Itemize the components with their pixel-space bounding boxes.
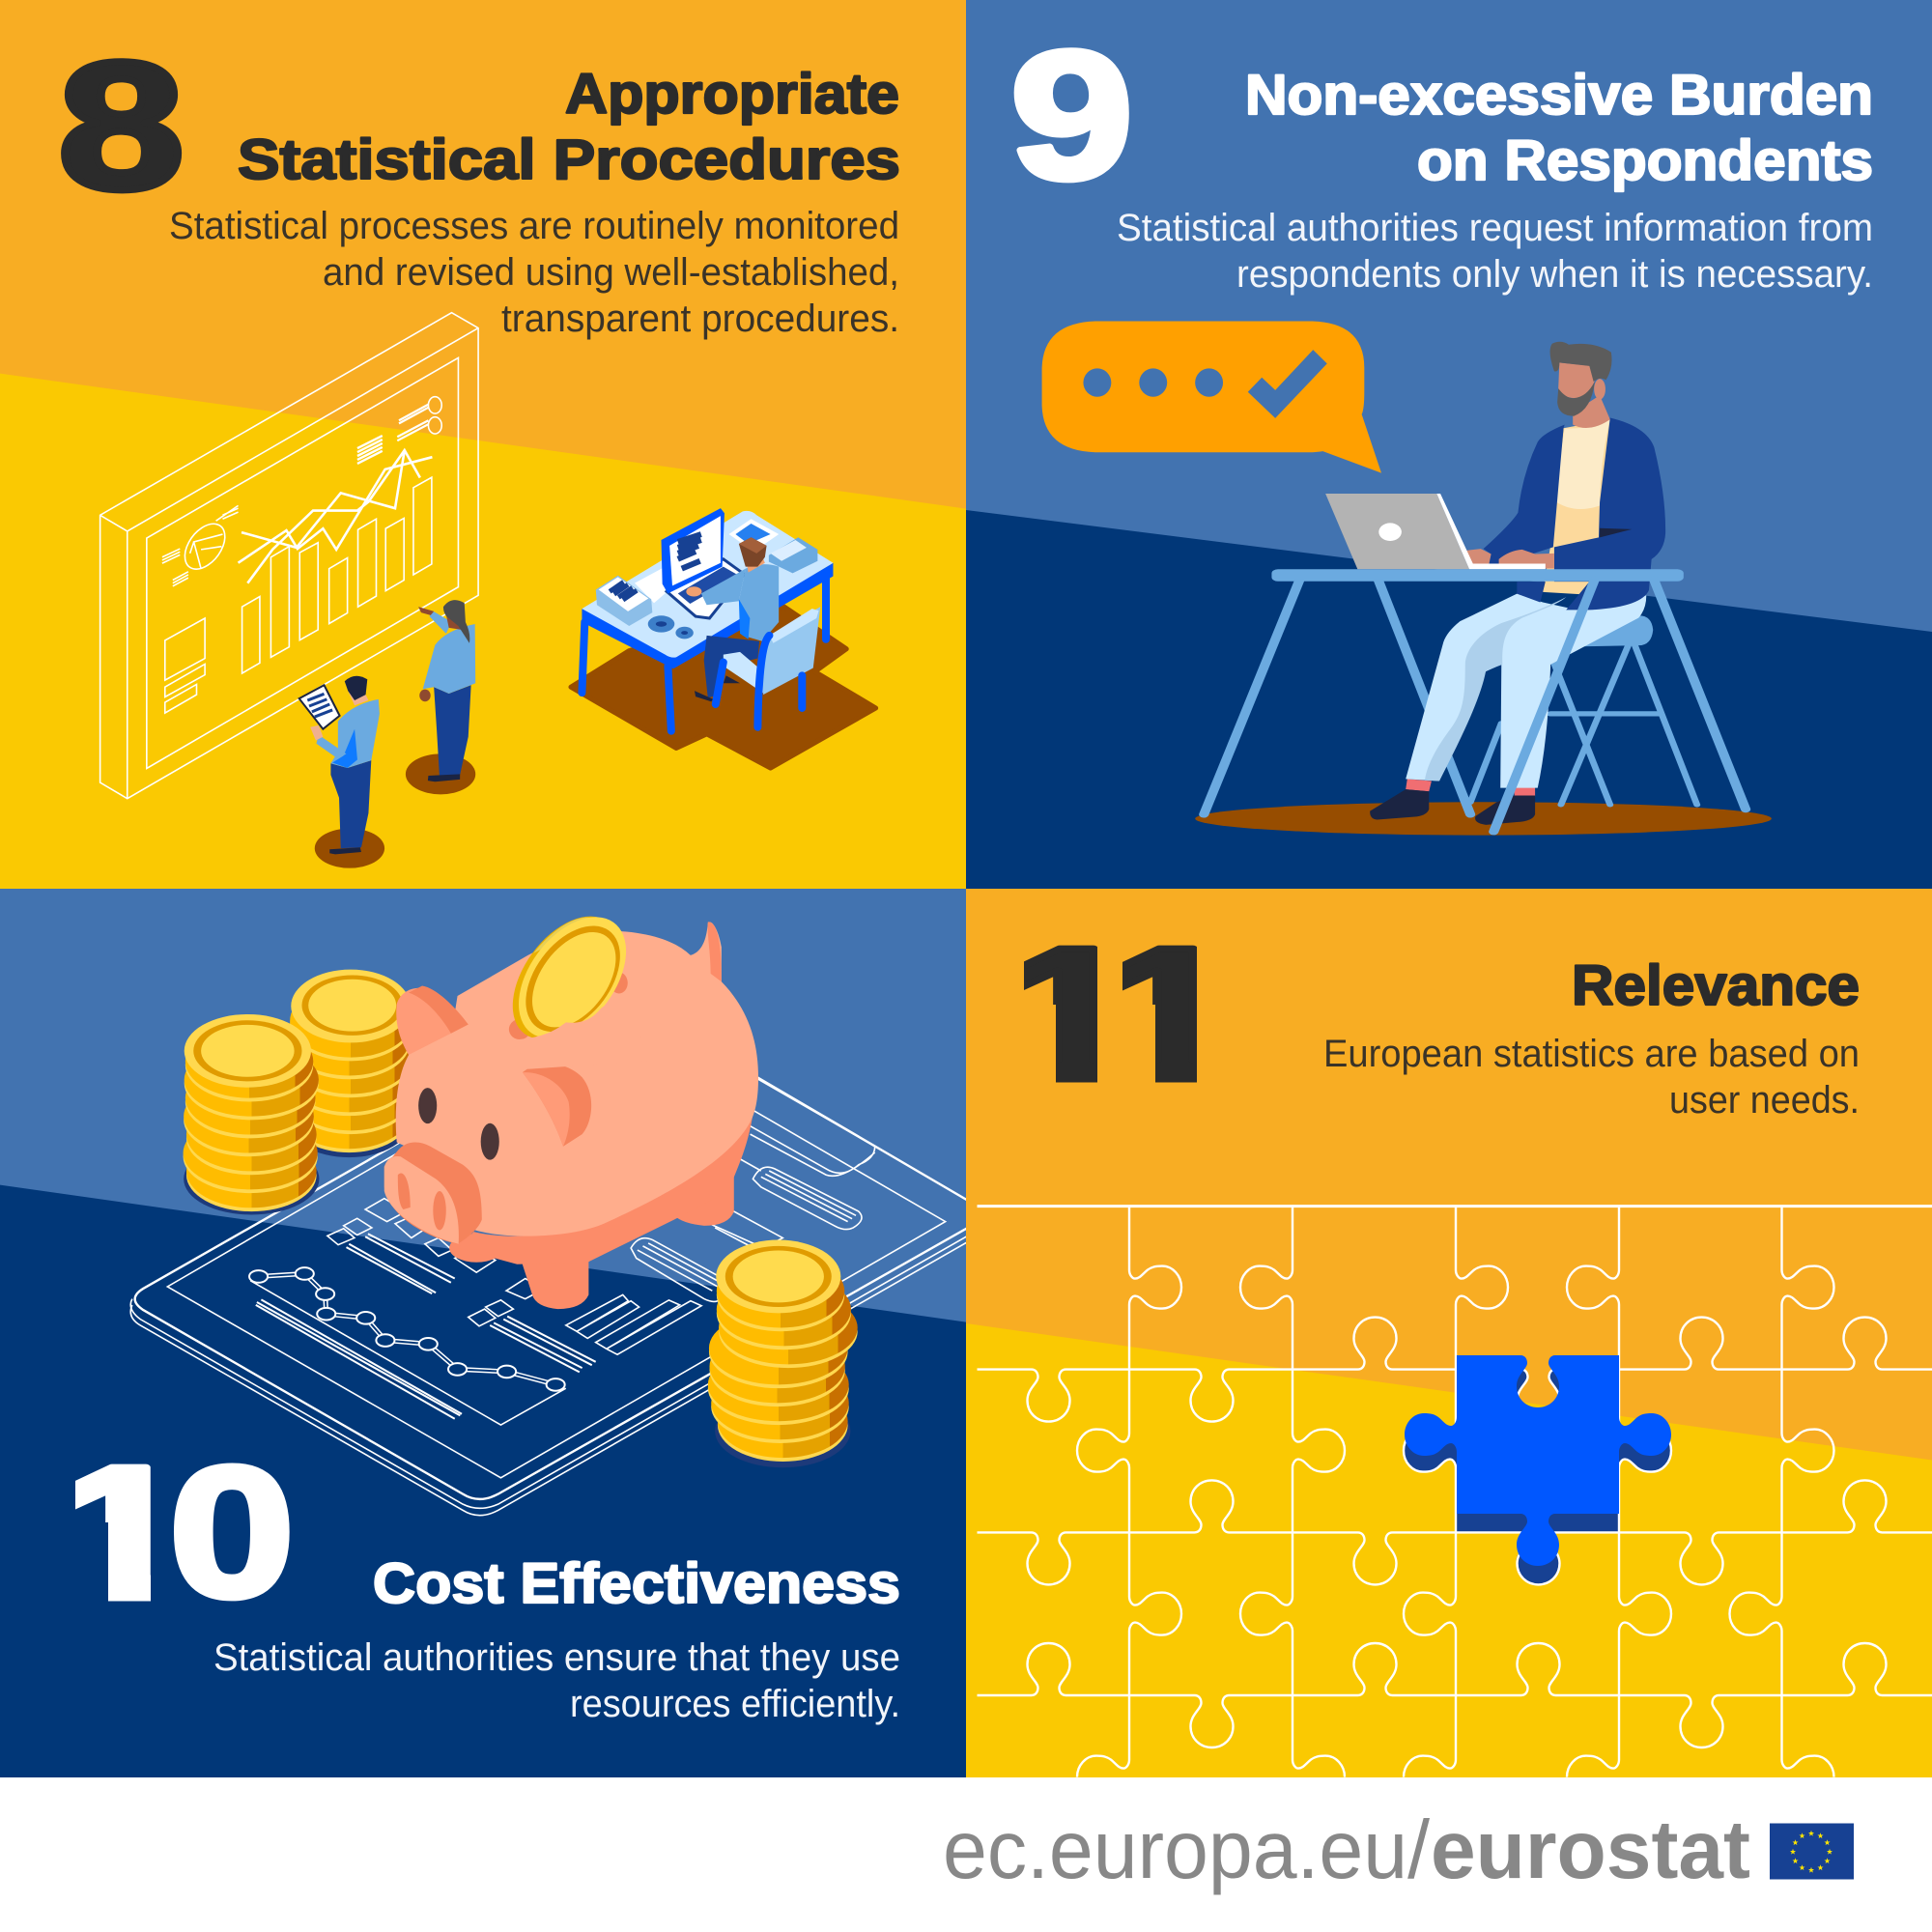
heading 8: Appropriate [565,63,899,126]
empty slot shadow [1404,1370,1671,1584]
illustration: piggy bank, coins and tablet [130,905,1000,1516]
heading 9: Non-excessive Burden [1245,64,1873,127]
heading 8: Statistical Procedures [238,128,900,191]
panel: principle 8 [0,0,966,889]
heading 11: Relevance [1572,954,1860,1017]
speech bubble with dots and check mark [1042,321,1381,473]
body text 9: respondents only when it is necessary. [1236,253,1873,296]
website address [943,1804,1750,1896]
panel 8 background [0,0,966,889]
body text 8: Statistical processes are routinely monitored [169,205,899,247]
number 11 [1024,945,1197,1082]
blue puzzle piece [1405,1355,1671,1566]
puzzle outline grid [978,1207,1932,1777]
body text 10 [213,1636,900,1725]
panel 10 background [0,889,966,1777]
body text 8: transparent procedures. [501,298,899,340]
body text 8 [169,205,899,340]
number 10 [75,1463,290,1602]
panel: principle 11 [966,889,1932,1777]
coin stack front left [184,1014,319,1214]
wireframe data board [100,313,478,799]
body text 9: Statistical authorities request information from [1117,207,1873,249]
number 8: 8 [58,24,185,227]
laptop [1325,494,1546,569]
heading 10: Cost Effectiveness [373,1552,900,1615]
floor shadow [1195,802,1772,836]
panel 8 yellow floor [0,374,966,889]
table top and front legs [1271,569,1746,832]
number 10: 1 [49,1427,194,1638]
coin entering the slot [512,916,626,1069]
number 9: 9 [1010,14,1133,216]
panel 10 navy floor [0,1185,966,1777]
panel: principle 10 [0,889,1000,1777]
woman pointing at the board [406,600,475,794]
jigsaw puzzle [978,1207,1932,1777]
seated man [1370,342,1665,825]
EU flag [1770,1824,1854,1880]
body text 11 [1323,1033,1860,1122]
desk with worker [571,508,876,768]
body text 9 [1117,207,1873,296]
footer [0,1777,1932,1932]
website address: eurostat [1431,1804,1750,1896]
chart line with nodes [249,1267,565,1391]
heading 8 [238,63,900,191]
coin stack back left [287,970,412,1157]
piggy bank [384,905,758,1309]
panel 9 background [966,0,1932,889]
footer background [0,1777,1932,1932]
number 10: 0 [169,1428,295,1635]
body text 11: European statistics are based on [1323,1033,1860,1075]
body text 10: resources efficiently. [570,1683,900,1725]
panel 11 background [966,889,1932,1777]
number 11: 1 [997,908,1142,1120]
panel 9 navy floor [966,510,1932,889]
body text 10: Statistical authorities ensure that they use [213,1636,900,1679]
body text 8: and revised using well-established, [323,251,899,294]
illustration: data wall with people and desk [100,313,876,868]
coin stack right [708,1240,858,1467]
website address: ec.europa.eu/ [943,1804,1430,1896]
heading 9: on Respondents [1417,129,1873,192]
stool [1470,615,1697,805]
number 11: 1 [1096,908,1241,1120]
panel: principle 9 [966,0,1932,889]
heading 9 [1245,64,1873,192]
wireframe tablet with charts [129,1076,966,1517]
man holding a tablet [299,676,384,868]
table back legs [1204,580,1470,814]
body text 11: user needs. [1669,1079,1860,1122]
illustration: man at laptop with speech bubble [1042,321,1772,836]
panel 11 yellow floor [966,1323,1932,1777]
